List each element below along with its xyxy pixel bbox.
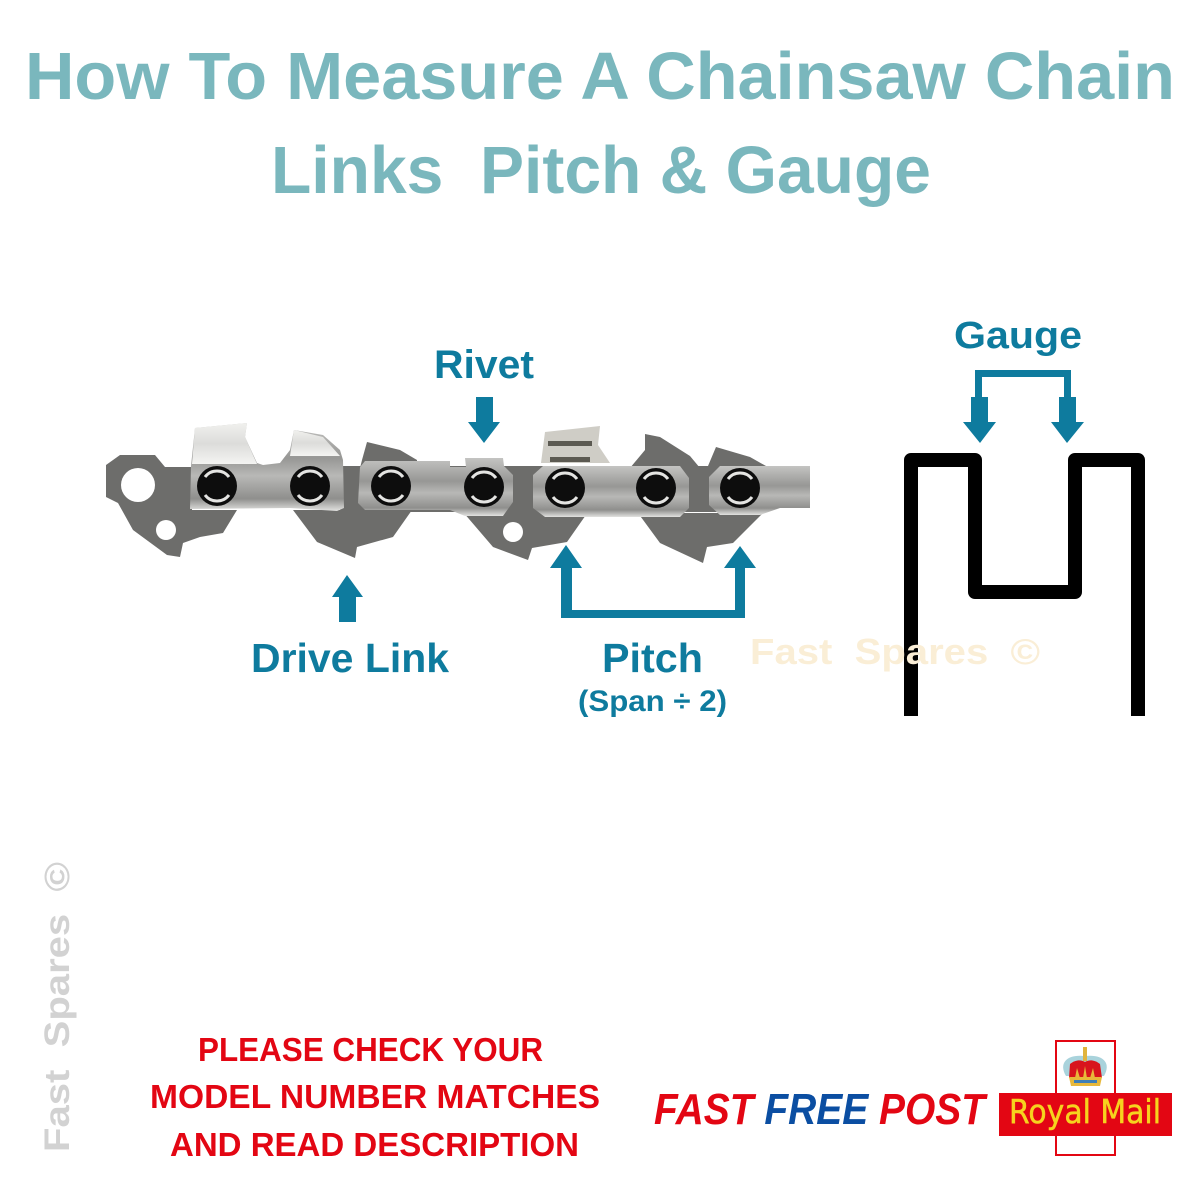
title: How To Measure A Chainsaw Chain bbox=[25, 39, 1175, 114]
label: Drive Link with arrow bbox=[251, 575, 449, 681]
fast free post text: FAST FREE POST bbox=[654, 1085, 988, 1134]
notice text bbox=[150, 1031, 600, 1163]
label: Drive Link with arrow: Drive Link bbox=[251, 635, 449, 681]
notice text: MODEL NUMBER MATCHES bbox=[150, 1078, 600, 1115]
notice text: PLEASE CHECK YOUR bbox=[198, 1031, 543, 1068]
label: Gauge with bracket arrows: Gauge bbox=[954, 315, 1082, 357]
cutters bbox=[190, 423, 344, 511]
title: Links Pitch & Gauge bbox=[271, 133, 931, 208]
title bbox=[25, 39, 1175, 208]
chainsaw chain photo bbox=[106, 423, 810, 563]
label: Rivet with arrow: Rivet bbox=[434, 343, 534, 387]
royal mail logo: Royal Mail bbox=[1009, 1092, 1161, 1131]
drive links (dark lower parts) bbox=[106, 434, 766, 563]
label: Pitch with bracket arrows: (Span ÷ 2) bbox=[578, 685, 727, 718]
label: Rivet with arrow bbox=[434, 343, 534, 443]
rivets bbox=[197, 466, 237, 506]
watermark vertical: Fast Spares © bbox=[38, 862, 77, 1152]
label: Gauge with bracket arrows bbox=[954, 315, 1084, 443]
gauge profile diagram bbox=[911, 460, 1138, 716]
royal mail logo bbox=[999, 1041, 1172, 1155]
label: Pitch with bracket arrows bbox=[550, 545, 756, 718]
watermark horizontal: Fast Spares © bbox=[750, 631, 1040, 672]
mounting holes bbox=[121, 468, 155, 502]
side straps bbox=[358, 458, 513, 516]
label: Pitch with bracket arrows: Pitch bbox=[602, 635, 703, 681]
icon: crown bbox=[1063, 1047, 1107, 1086]
notice text: AND READ DESCRIPTION bbox=[170, 1126, 579, 1163]
